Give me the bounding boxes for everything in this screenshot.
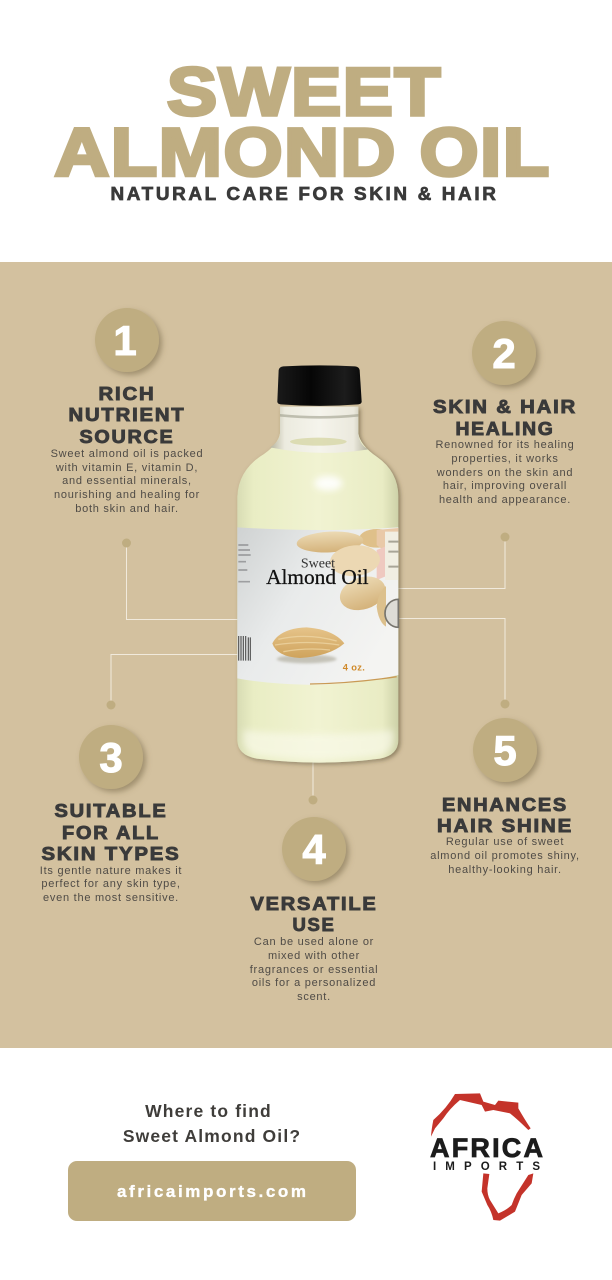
number badge 4 xyxy=(282,817,346,881)
number badge 1: 1 xyxy=(113,317,137,364)
body text 4: mixed with other xyxy=(268,950,360,962)
benefit 1 xyxy=(51,308,203,515)
body text 4: fragrances or essential xyxy=(250,964,378,976)
heading 1: RICH xyxy=(98,384,156,404)
panel: benefits background xyxy=(0,262,612,1048)
body text 5 xyxy=(430,836,580,876)
label small print xyxy=(238,545,251,582)
logo africa outline xyxy=(431,1093,533,1221)
body text 2: hair, improving overall xyxy=(443,480,567,492)
title: SWEET xyxy=(167,54,442,130)
logo: Africa Imports xyxy=(430,1093,543,1221)
number badge 5: 5 xyxy=(493,727,517,774)
heading 3 xyxy=(42,801,180,864)
heading 3: FOR ALL xyxy=(62,823,160,843)
bottle base glass xyxy=(243,730,393,759)
footer question: Where to find xyxy=(145,1101,272,1121)
benefit 2 xyxy=(433,321,577,506)
heading 1: SOURCE xyxy=(80,427,174,447)
label text: Almond Oil: Almond Oil xyxy=(266,565,369,589)
heading 4: VERSATILE xyxy=(250,894,378,914)
benefit 4 xyxy=(250,817,378,1003)
connector: benefit 3 xyxy=(106,654,240,710)
heading 2: SKIN & HAIR xyxy=(433,397,577,417)
website button xyxy=(68,1161,356,1221)
heading 3: SKIN TYPES xyxy=(42,844,180,864)
heading 1: NUTRIENT xyxy=(68,405,186,425)
body text 4: scent. xyxy=(297,991,331,1003)
body text 4: oils for a personalized xyxy=(252,977,376,989)
body text 3: perfect for any skin type, xyxy=(41,878,181,890)
logo word IMPORTS: IMPORTS xyxy=(433,1161,540,1173)
number badge 4: 4 xyxy=(302,826,326,873)
heading 5: ENHANCES xyxy=(442,795,568,815)
title xyxy=(54,54,551,191)
cap xyxy=(277,365,362,406)
subtitle: NATURAL CARE FOR SKIN & HAIR xyxy=(110,184,498,204)
label text: 4 oz: 4 oz. xyxy=(343,663,365,673)
body text 3: even the most sensitive. xyxy=(43,892,179,904)
body text 2 xyxy=(435,439,575,506)
body text 1: nourishing and healing for xyxy=(54,489,200,501)
benefit 5 xyxy=(430,718,580,876)
heading 5 xyxy=(437,795,573,836)
body text 2: Renowned for its healing xyxy=(435,439,575,451)
body text 3: Its gentle nature makes it xyxy=(40,865,182,877)
neck collar band xyxy=(280,414,358,419)
footer question xyxy=(123,1101,301,1146)
bottle neck glass xyxy=(270,407,368,453)
body text 5: healthy-looking hair. xyxy=(448,864,562,876)
body text 5: Regular use of sweet xyxy=(446,836,564,848)
heading 2: HEALING xyxy=(456,419,554,439)
bottle body xyxy=(237,407,398,763)
title: ALMOND OIL xyxy=(54,115,551,191)
body text 1: both skin and hair. xyxy=(75,503,179,515)
number badge 3 xyxy=(79,725,143,789)
body text 2: health and appearance. xyxy=(439,494,571,506)
body text 4: Can be used alone or xyxy=(254,936,374,948)
body text 1: and essential minerals, xyxy=(62,475,192,487)
oil surface xyxy=(290,438,347,446)
number badge 2: 2 xyxy=(492,330,516,377)
heading 4 xyxy=(250,894,378,935)
body text 3 xyxy=(40,865,182,904)
body text 4 xyxy=(250,936,378,1003)
heading 1 xyxy=(68,384,186,447)
heading 3: SUITABLE xyxy=(54,801,168,821)
connector: benefit 4 xyxy=(308,760,318,804)
logo word AFRICA: AFRICA xyxy=(430,1133,543,1163)
body text 1 xyxy=(51,448,203,515)
benefit 3 xyxy=(40,725,182,904)
body text 5: almond oil promotes shiny, xyxy=(430,850,580,862)
heading 2 xyxy=(433,397,577,439)
number badge 3: 3 xyxy=(99,734,123,781)
label almonds xyxy=(272,528,398,663)
website button: africaimports.com xyxy=(117,1182,306,1201)
connector: benefit 5 xyxy=(395,618,510,708)
number badge 5 xyxy=(473,718,537,782)
heading 4: USE xyxy=(292,915,336,935)
label edge stain xyxy=(310,677,397,684)
heading 5: HAIR SHINE xyxy=(437,816,573,836)
label text: Sweet: Sweet xyxy=(301,556,335,571)
connector: benefit 2 xyxy=(395,532,510,588)
body text 1: Sweet almond oil is packed xyxy=(51,448,203,460)
barcode xyxy=(239,636,250,661)
body text 2: properties, it works xyxy=(451,453,559,465)
body text 1: with vitamin E, vitamin D, xyxy=(55,462,198,474)
body text 2: wonders on the skin and xyxy=(436,467,573,479)
footer question: Sweet Almond Oil? xyxy=(123,1126,301,1146)
label xyxy=(237,527,398,685)
bottle photo xyxy=(237,365,398,763)
connector: benefit 1 xyxy=(122,538,240,620)
number badge 1 xyxy=(95,308,159,372)
number badge 2 xyxy=(472,321,536,385)
bottle highlight xyxy=(314,476,342,491)
